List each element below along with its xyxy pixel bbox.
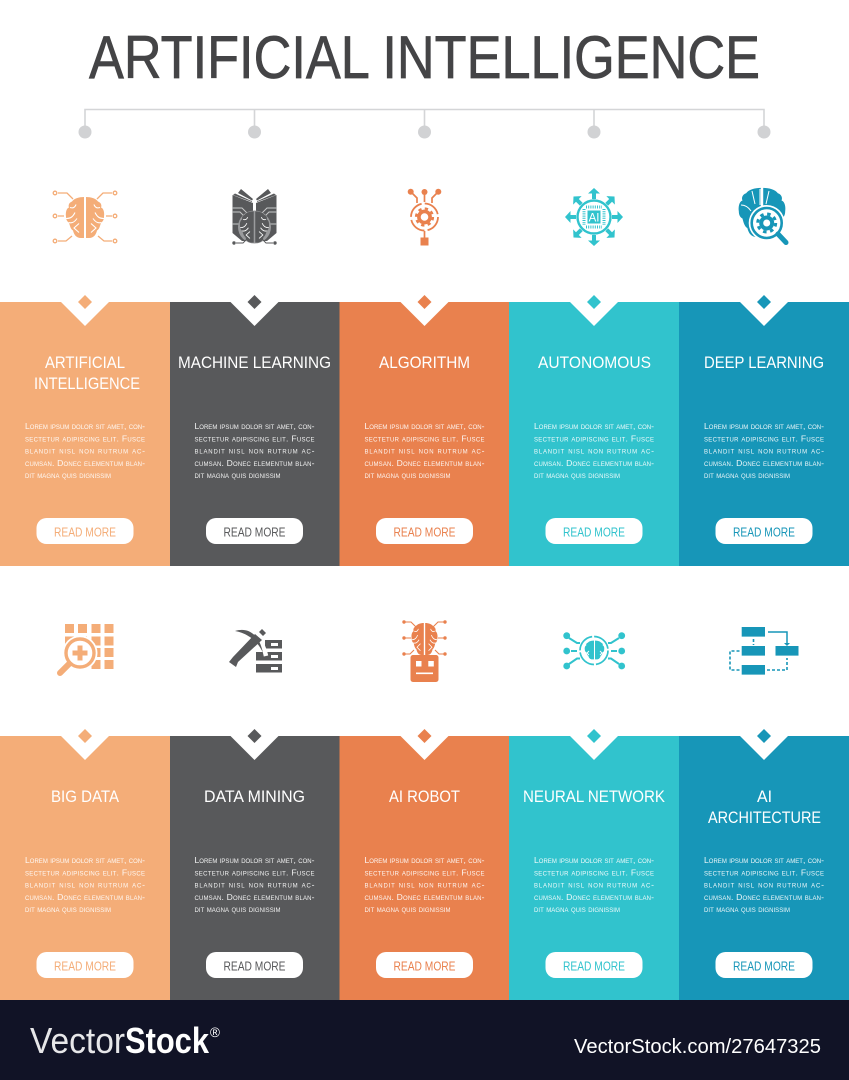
body text: blandit nisl non rutrum ac- bbox=[364, 446, 485, 456]
body text bbox=[25, 855, 145, 914]
heading bbox=[34, 353, 140, 393]
heading: ARCHITECTURE bbox=[708, 808, 821, 827]
button bbox=[716, 518, 812, 544]
marker diamond bbox=[418, 729, 432, 743]
body text: blandit nisl non rutrum ac- bbox=[194, 446, 315, 456]
body text: sectetur adipiscing elit. Fusce bbox=[194, 433, 314, 443]
heading: NEURAL NETWORK bbox=[523, 787, 666, 806]
footer logo: Stock bbox=[125, 1020, 210, 1061]
body text: blandit nisl non rutrum ac- bbox=[25, 880, 145, 890]
button: READ MORE bbox=[394, 524, 456, 540]
heading: AUTONOMOUS bbox=[538, 353, 651, 372]
marker diamond bbox=[757, 295, 771, 309]
body text: dit magna quis dignissim bbox=[364, 470, 450, 480]
body text bbox=[704, 855, 824, 914]
icon: neural network bbox=[563, 632, 625, 669]
icon: autonomous AI chip bbox=[565, 188, 623, 246]
body text: blandit nisl non rutrum ac- bbox=[194, 880, 315, 890]
body text: sectetur adipiscing elit. Fusce bbox=[364, 433, 484, 443]
button bbox=[36, 518, 134, 544]
panel: AI robot bbox=[340, 729, 509, 1000]
body text: cumsan. Donec elementum blan- bbox=[534, 458, 654, 468]
panel: neural network bbox=[509, 729, 679, 1000]
body text: Lorem ipsum dolor sit amet, con- bbox=[534, 421, 654, 431]
body text: Lorem ipsum dolor sit amet, con- bbox=[704, 421, 824, 431]
body text: cumsan. Donec elementum blan- bbox=[534, 892, 654, 902]
heading: MACHINE LEARNING bbox=[178, 353, 331, 372]
body text bbox=[364, 421, 485, 480]
body text: dit magna quis dignissim bbox=[704, 904, 790, 914]
body text: Lorem ipsum dolor sit amet, con- bbox=[704, 855, 824, 865]
button bbox=[206, 952, 303, 978]
body text bbox=[534, 421, 654, 480]
body text: dit magna quis dignissim bbox=[194, 470, 280, 480]
body text: sectetur adipiscing elit. Fusce bbox=[364, 867, 484, 877]
button: READ MORE bbox=[224, 524, 286, 540]
button: READ MORE bbox=[563, 524, 625, 540]
body text bbox=[704, 421, 824, 480]
icon: autonomous AI chip: AI bbox=[589, 212, 599, 224]
body text: blandit nisl non rutrum ac- bbox=[704, 446, 824, 456]
body text: cumsan. Donec elementum blan- bbox=[194, 892, 315, 902]
body text bbox=[194, 421, 315, 480]
footer logo bbox=[30, 1020, 220, 1061]
button: READ MORE bbox=[54, 958, 116, 974]
footer logo: Vector bbox=[30, 1020, 125, 1061]
body text: cumsan. Donec elementum blan- bbox=[25, 892, 145, 902]
marker diamond bbox=[587, 295, 601, 309]
heading: AI ROBOT bbox=[389, 787, 460, 806]
body text: cumsan. Donec elementum blan- bbox=[364, 892, 485, 902]
body text: cumsan. Donec elementum blan- bbox=[704, 892, 824, 902]
body text: sectetur adipiscing elit. Fusce bbox=[25, 433, 145, 443]
body text bbox=[534, 855, 654, 914]
body text bbox=[364, 855, 485, 914]
body text: dit magna quis dignissim bbox=[194, 904, 280, 914]
heading: ALGORITHM bbox=[379, 353, 470, 372]
heading: DEEP LEARNING bbox=[704, 353, 824, 372]
body text: cumsan. Donec elementum blan- bbox=[704, 458, 824, 468]
icon: AI architecture flowchart bbox=[730, 627, 798, 675]
footer logo: ® bbox=[210, 1025, 220, 1040]
button: READ MORE bbox=[733, 958, 795, 974]
body text: Lorem ipsum dolor sit amet, con- bbox=[364, 855, 485, 865]
body text bbox=[194, 855, 315, 914]
body text: blandit nisl non rutrum ac- bbox=[364, 880, 485, 890]
button bbox=[546, 518, 642, 544]
body text: Lorem ipsum dolor sit amet, con- bbox=[534, 855, 654, 865]
button: READ MORE bbox=[733, 524, 795, 540]
button: READ MORE bbox=[563, 958, 625, 974]
body text: blandit nisl non rutrum ac- bbox=[25, 446, 145, 456]
marker diamond bbox=[78, 729, 92, 743]
icon: data mining pickaxe bbox=[229, 629, 282, 672]
body text: sectetur adipiscing elit. Fusce bbox=[704, 433, 824, 443]
button: READ MORE bbox=[224, 958, 286, 974]
body text: Lorem ipsum dolor sit amet, con- bbox=[25, 855, 145, 865]
icon: circuit brain bbox=[53, 191, 117, 243]
body text: sectetur adipiscing elit. Fusce bbox=[534, 867, 654, 877]
icon: AI robot bbox=[402, 620, 447, 682]
marker diamond bbox=[587, 729, 601, 743]
body text: cumsan. Donec elementum blan- bbox=[364, 458, 485, 468]
button bbox=[546, 952, 642, 978]
body text: Lorem ipsum dolor sit amet, con- bbox=[194, 421, 315, 431]
panel: data mining bbox=[170, 729, 340, 1000]
body text bbox=[25, 421, 145, 480]
body text: dit magna quis dignissim bbox=[704, 470, 790, 480]
button: READ MORE bbox=[54, 524, 116, 540]
icon: deep learning brain and magnifier bbox=[739, 188, 786, 242]
title: ARTIFICIAL INTELLIGENCE bbox=[89, 24, 760, 91]
heading: DATA MINING bbox=[204, 787, 305, 806]
body text: sectetur adipiscing elit. Fusce bbox=[534, 433, 654, 443]
heading bbox=[708, 787, 821, 827]
icon: big data magnifier bbox=[60, 624, 114, 673]
body text: blandit nisl non rutrum ac- bbox=[534, 446, 654, 456]
heading: BIG DATA bbox=[51, 787, 120, 806]
marker diamond bbox=[248, 295, 262, 309]
body text: Lorem ipsum dolor sit amet, con- bbox=[25, 421, 145, 431]
body text: cumsan. Donec elementum blan- bbox=[194, 458, 315, 468]
panel: AI architecture bbox=[679, 729, 849, 1000]
body text: Lorem ipsum dolor sit amet, con- bbox=[364, 421, 485, 431]
body text: dit magna quis dignissim bbox=[25, 904, 111, 914]
body text: sectetur adipiscing elit. Fusce bbox=[704, 867, 824, 877]
marker diamond bbox=[418, 295, 432, 309]
icon: book with brain bbox=[232, 189, 277, 245]
marker diamond bbox=[248, 729, 262, 743]
body text: sectetur adipiscing elit. Fusce bbox=[194, 867, 314, 877]
body text: dit magna quis dignissim bbox=[364, 904, 450, 914]
panel: autonomous bbox=[509, 295, 679, 566]
body text: blandit nisl non rutrum ac- bbox=[704, 880, 824, 890]
panel: algorithm bbox=[340, 295, 509, 566]
button bbox=[376, 518, 473, 544]
body text: dit magna quis dignissim bbox=[534, 470, 620, 480]
heading: INTELLIGENCE bbox=[34, 374, 140, 393]
button bbox=[376, 952, 473, 978]
body text: sectetur adipiscing elit. Fusce bbox=[25, 867, 145, 877]
body text: blandit nisl non rutrum ac- bbox=[534, 880, 654, 890]
panel: big data bbox=[0, 729, 170, 1000]
body text: dit magna quis dignissim bbox=[25, 470, 111, 480]
panel: artificial intelligence bbox=[0, 295, 170, 566]
icon: algorithm gear bbox=[408, 189, 441, 246]
footer bar bbox=[0, 1000, 849, 1080]
button bbox=[36, 952, 134, 978]
panel: deep learning bbox=[679, 295, 849, 566]
button: READ MORE bbox=[394, 958, 456, 974]
panel: machine learning bbox=[170, 295, 340, 566]
button bbox=[206, 518, 303, 544]
body text: dit magna quis dignissim bbox=[534, 904, 620, 914]
footer image id: VectorStock.com/27647325 bbox=[574, 1036, 821, 1058]
heading: AI bbox=[757, 787, 772, 806]
marker diamond bbox=[757, 729, 771, 743]
body text: Lorem ipsum dolor sit amet, con- bbox=[194, 855, 315, 865]
button bbox=[716, 952, 812, 978]
heading: ARTIFICIAL bbox=[45, 353, 125, 372]
body text: cumsan. Donec elementum blan- bbox=[25, 458, 145, 468]
marker diamond bbox=[78, 295, 92, 309]
timeline connector bbox=[78, 110, 770, 138]
